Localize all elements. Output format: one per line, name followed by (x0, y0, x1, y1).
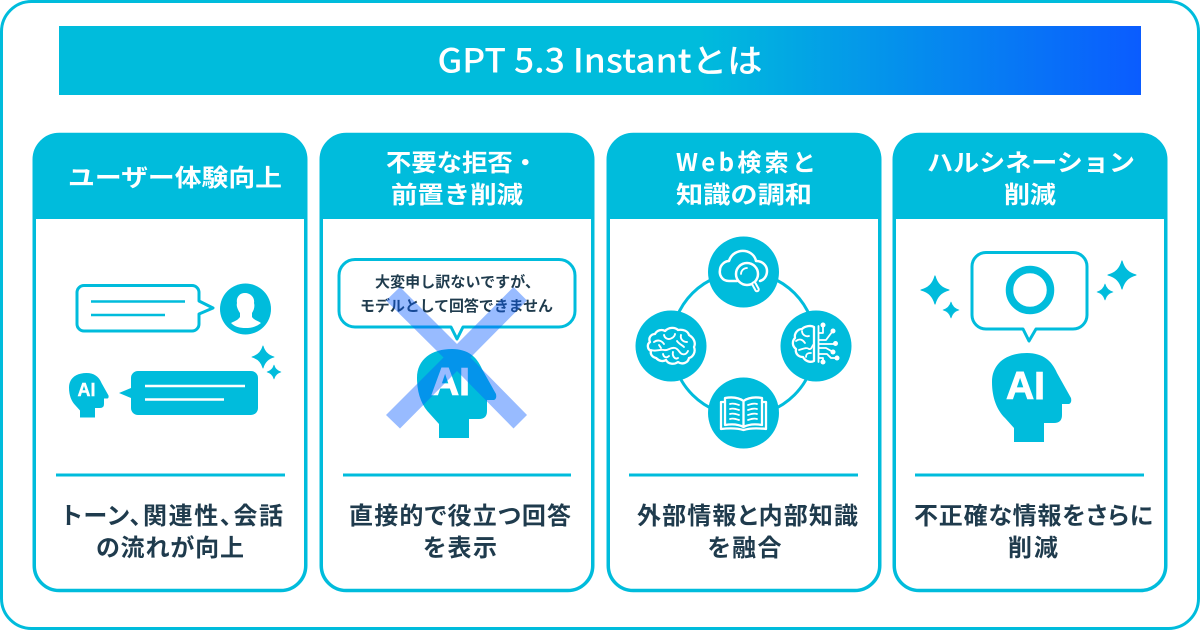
icon: AI head (992, 353, 1071, 442)
text block (637, 496, 858, 563)
panel: reducing refusals (320, 133, 594, 590)
text block: の流れが向上 (96, 528, 244, 563)
text block: を融合 (708, 528, 782, 563)
text block: 削減 (1008, 528, 1058, 563)
heading: ハルシネーション (927, 143, 1135, 178)
title banner (59, 26, 1141, 95)
icon: AI bubble (119, 371, 258, 415)
panel: user experience (33, 133, 307, 590)
ring connector (672, 272, 816, 416)
text block: 外部情報と内部知識 (637, 496, 858, 531)
heading: 不要な拒否・ (386, 143, 538, 178)
icon: sparkles (252, 346, 281, 379)
text block: トーン、関連性、会話 (62, 496, 283, 531)
text block (62, 496, 283, 563)
icon: AI head: AI (431, 361, 470, 404)
icon: refusal bubble: モデルとして回答できません (360, 295, 553, 316)
icon: AI head: AI (1006, 365, 1045, 408)
icon: refusal bubble (339, 260, 575, 339)
icon: user bubble (77, 286, 213, 331)
icon: AI brain (780, 310, 852, 382)
icon: AI head small (69, 373, 109, 418)
heading: Web検索と (676, 143, 816, 178)
text block (914, 496, 1153, 563)
title: GPT 5.3 Instantとは (438, 34, 762, 82)
icon: book (708, 378, 779, 448)
icon: brain (636, 310, 706, 382)
text block (349, 496, 571, 563)
heading: ユーザー体験向上 (68, 158, 282, 193)
text block: を表示 (423, 528, 497, 563)
heading: 前置き削減 (391, 175, 523, 210)
icon: AI head (417, 349, 496, 438)
icon: user avatar (220, 284, 271, 334)
icon: cloud search (708, 236, 779, 308)
icon: refusal bubble: 大変申し訳ないですが、 (375, 271, 540, 292)
heading (676, 143, 816, 210)
heading: 削減 (1004, 175, 1056, 210)
panel: hallucination reduction (893, 133, 1167, 590)
panel: web and knowledge (607, 133, 881, 590)
icon: cross mark (386, 287, 527, 428)
text block: 不正確な情報をさらに (914, 496, 1153, 531)
icon: circle mark (1010, 270, 1050, 310)
icon: answer bubble (972, 252, 1087, 341)
heading (927, 143, 1135, 210)
heading (386, 143, 538, 210)
heading: 知識の調和 (676, 175, 812, 210)
icon: sparkles (921, 261, 1136, 318)
text block: 直接的で役立つ回答 (349, 496, 571, 531)
icon: AI head small: AI (78, 380, 96, 400)
